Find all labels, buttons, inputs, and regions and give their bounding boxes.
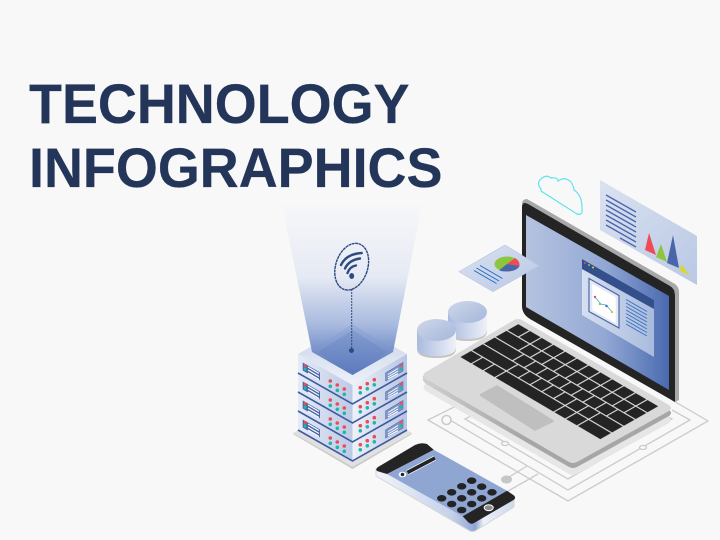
- window chart frame: [589, 278, 619, 328]
- laptop base: [423, 319, 671, 475]
- laptop lid edge: [522, 199, 679, 402]
- home button: [484, 505, 493, 511]
- title: INFOGRAPHICS: [29, 136, 442, 199]
- report text lines: [606, 195, 636, 247]
- card text lines: [474, 266, 502, 284]
- window control dots: [584, 262, 594, 268]
- wifi icon: [329, 239, 374, 294]
- screen window: [582, 259, 654, 357]
- light beam from server: [282, 205, 422, 375]
- laptop: [423, 199, 679, 475]
- window title bar: [582, 259, 654, 309]
- server unit 4: [298, 411, 407, 461]
- window line chart: [592, 284, 616, 323]
- pie chart: [494, 256, 520, 272]
- database cylinders: [417, 301, 487, 358]
- circuit lines under laptop: [428, 400, 708, 501]
- server base plate: [293, 399, 412, 469]
- beam inner diamond: [318, 330, 387, 375]
- phone top bezel: [376, 443, 434, 474]
- phone body: [376, 446, 514, 532]
- title: TECHNOLOGY: [29, 72, 410, 135]
- beam floor diamond: [312, 324, 393, 375]
- server unit 2: [298, 373, 407, 423]
- server unit 1: [298, 354, 407, 404]
- phone bottom bezel: [463, 491, 515, 524]
- phone screen: [387, 450, 507, 516]
- title: [29, 72, 442, 199]
- cylinder front: [417, 319, 456, 358]
- laptop screen: [526, 215, 669, 390]
- dotted connector with node: [349, 289, 354, 353]
- trackpad: [481, 386, 552, 430]
- triangle chart: [645, 233, 690, 276]
- keyboard keys: [461, 324, 658, 439]
- pie chart card: [459, 245, 539, 292]
- window text lines: [626, 300, 647, 336]
- cloud outline icon: [538, 176, 582, 214]
- cylinder back: [448, 301, 487, 341]
- server top face: [298, 323, 407, 385]
- keypad dots: [437, 477, 497, 513]
- laptop lid bezel: [522, 203, 675, 402]
- slider bar: [399, 458, 435, 477]
- smartphone: [376, 443, 515, 532]
- server rack: [293, 323, 412, 469]
- server unit 3: [298, 392, 407, 442]
- report card with triangles chart: [600, 180, 697, 285]
